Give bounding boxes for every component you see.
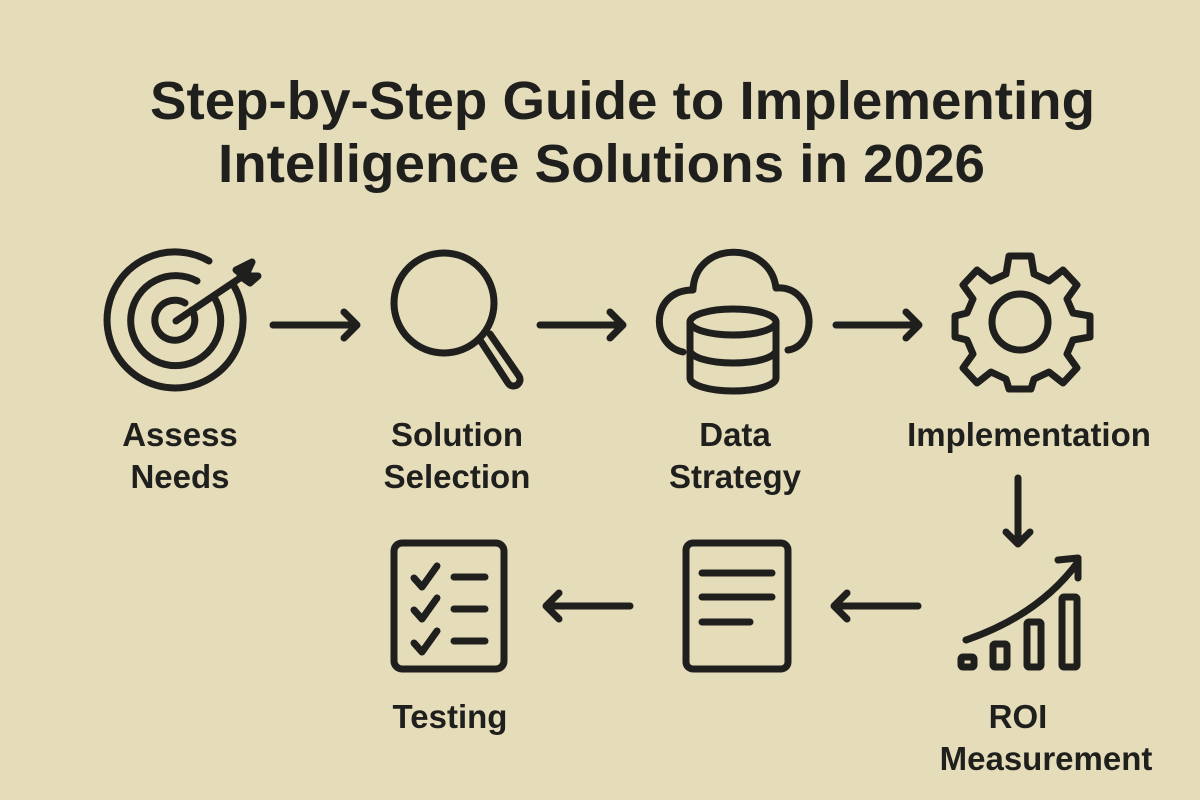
- label: Assess Needs: Needs: [130, 458, 230, 495]
- icon: document: [686, 543, 788, 669]
- icon: magnifier: [394, 253, 520, 386]
- arrow: 2 to 3: [540, 312, 623, 338]
- label: Solution Selection: Selection: [384, 458, 530, 495]
- label: Assess Needs: Assess: [122, 416, 238, 453]
- label: Solution Selection: [384, 416, 530, 495]
- arrow: 3 to 4: [836, 312, 919, 338]
- title: Step-by-Step Guide to Implementing: [150, 71, 1095, 131]
- icon: gear: [955, 256, 1090, 389]
- arrow: 1 to 2: [273, 312, 357, 338]
- label: Testing: Testing: [393, 698, 507, 735]
- icon: checklist: [394, 543, 504, 669]
- title: [150, 71, 1095, 194]
- arrow: 6 to 7: [546, 593, 630, 619]
- label: ROI Measurement: ROI: [989, 698, 1047, 735]
- label: Data Strategy: [669, 416, 802, 495]
- label: Assess Needs: [122, 416, 238, 495]
- arrow: 5 to 6: [834, 593, 918, 619]
- label: Data Strategy: Strategy: [669, 458, 802, 495]
- icon: ROI chart: [961, 558, 1078, 667]
- label: ROI Measurement: Measurement: [940, 740, 1152, 777]
- label: Solution Selection: Solution: [391, 416, 523, 453]
- title: Intelligence Solutions in 2026: [218, 134, 985, 194]
- label: Implementation: Implementation: [907, 416, 1151, 453]
- arrow: down: [1006, 478, 1030, 544]
- label: ROI Measurement: [940, 698, 1152, 777]
- icon: cloud database: [659, 252, 809, 391]
- icon: target: [107, 252, 258, 388]
- label: Data Strategy: Data: [699, 416, 771, 453]
